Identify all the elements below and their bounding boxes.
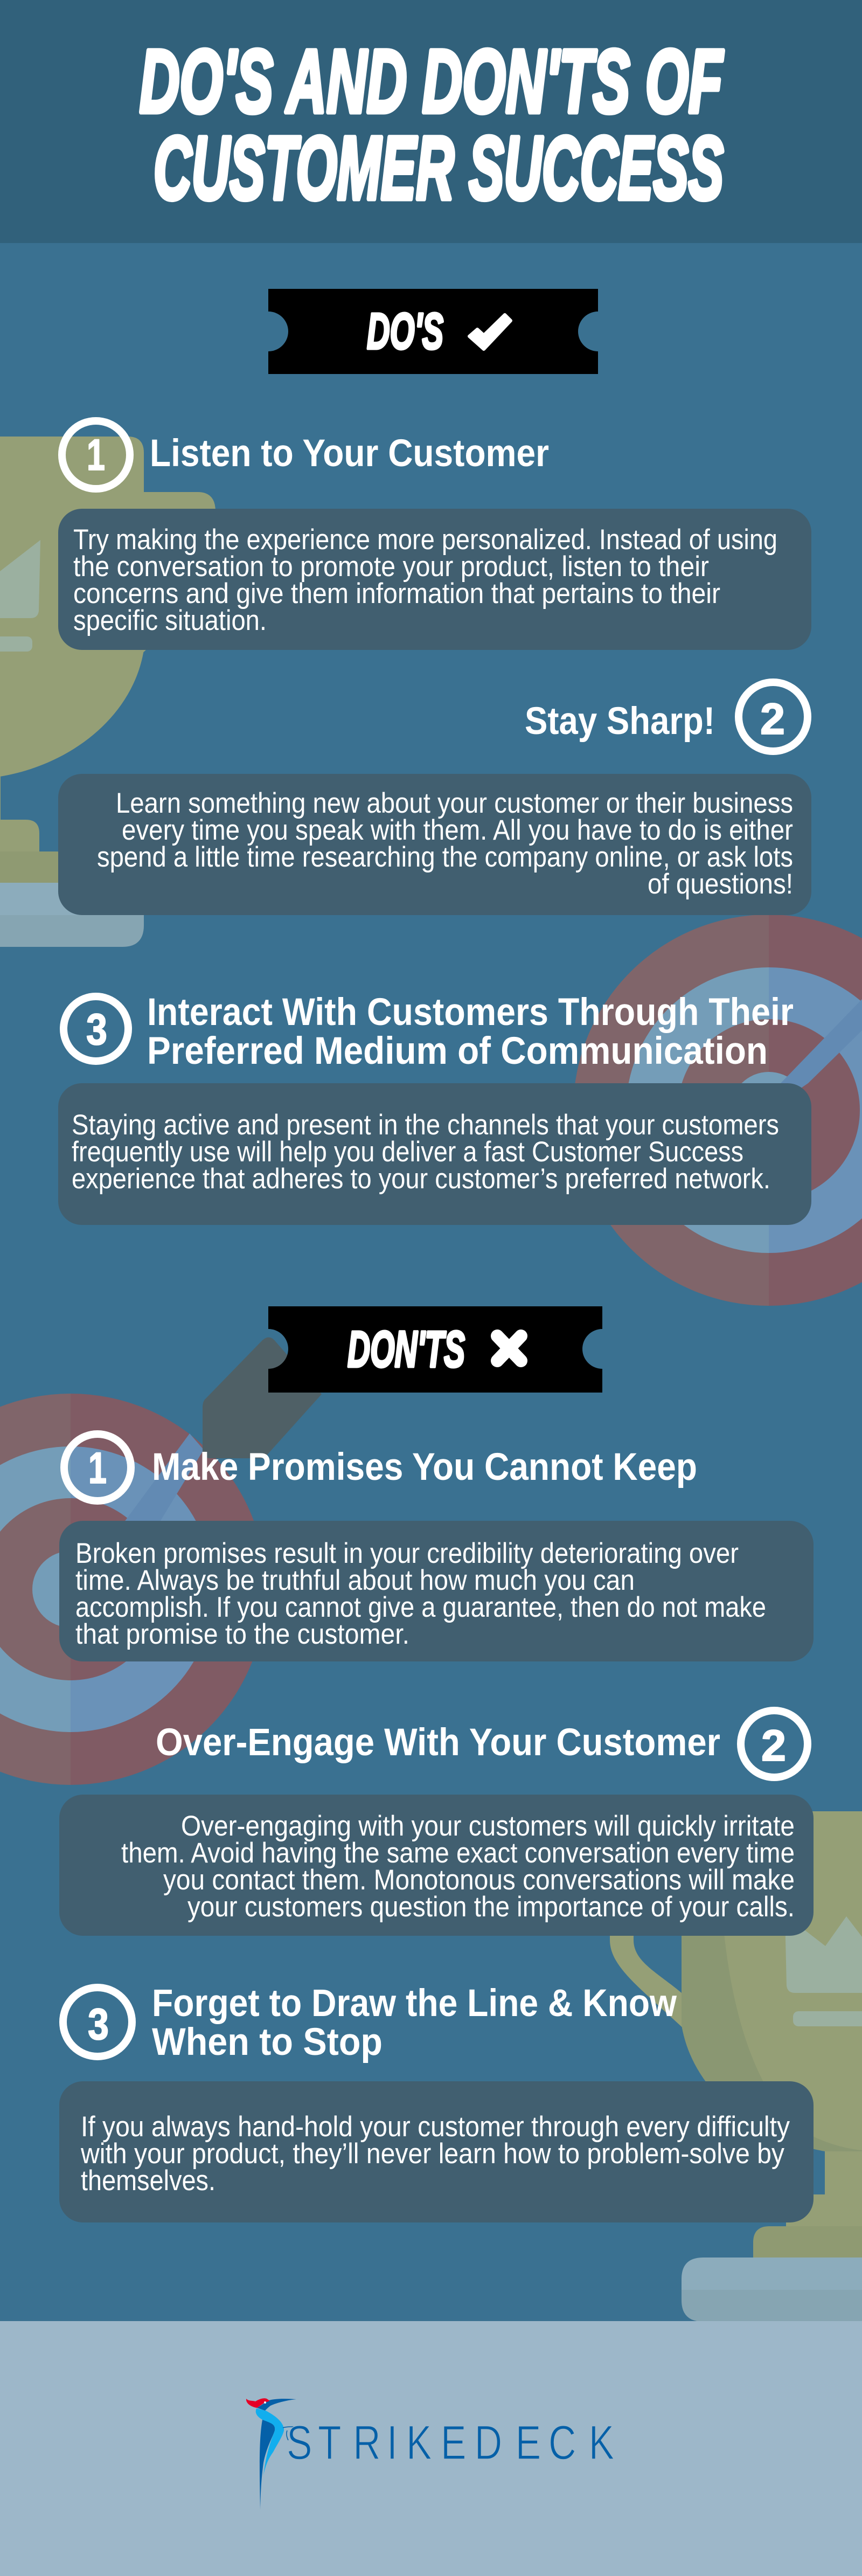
text panel: accomplish. If you cannot give a guarantee, then do not make [75, 1591, 766, 1623]
do 1: listen to your customer [58, 421, 811, 650]
heading: When to Stop [152, 2021, 383, 2063]
text panel: Staying active and present in the channels that your customers [72, 1109, 779, 1141]
don't 3: draw the line [59, 1982, 814, 2222]
icon: cross [497, 1336, 521, 1361]
heading: Forget to Draw the Line & Know [152, 1982, 677, 2025]
background illustration: left target and arrow [0, 1337, 322, 1785]
text panel: If you always hand-hold your customer through every difficulty [81, 2111, 790, 2143]
section banner: do's [268, 289, 598, 374]
text panel: concerns and give them information that pertains to their [73, 578, 720, 610]
text panel: every time you speak with them. All you have to do is either [122, 814, 793, 846]
do 3: preferred medium [58, 991, 811, 1225]
number badge 3: 3 [88, 2000, 109, 2049]
background illustration: left trophy [0, 437, 215, 947]
number badge 3 [64, 996, 128, 1061]
do 2: stay sharp [58, 682, 811, 915]
text panel: the conversation to promote your product, listen to their [73, 551, 709, 583]
background illustration: right trophy [610, 1811, 862, 2322]
text panel [59, 2081, 814, 2222]
logo: strikedeck [246, 2398, 614, 2510]
text panel: experience that adheres to your customer’s preferred network. [72, 1163, 770, 1195]
heading [147, 991, 794, 1072]
heading: Stay Sharp! [525, 700, 715, 743]
don't 2: over-engage [59, 1711, 814, 1936]
icon: woodpecker [246, 2398, 296, 2510]
text panel [59, 1521, 814, 1661]
number badge 2 [741, 1711, 808, 1777]
number badge 2: 2 [760, 695, 785, 744]
header band [0, 0, 862, 243]
text panel: spend a little time researching the company online, or ask lots [97, 841, 793, 873]
number badge 3: 3 [86, 1005, 107, 1054]
background illustration: right target [573, 915, 862, 1306]
heading: Make Promises You Cannot Keep [152, 1446, 697, 1488]
text panel: specific situation. [73, 605, 267, 636]
number badge 2: 2 [761, 1721, 786, 1770]
text panel: that promise to the customer. [75, 1618, 409, 1650]
text panel: with your product, they’ll never learn how to problem-solve by [80, 2138, 784, 2170]
section banner: don'ts [268, 1306, 602, 1393]
section banner: do's: DO'S [367, 303, 443, 360]
text panel: of questions! [648, 868, 793, 900]
text panel: time. Always be truthful about how much you can [75, 1564, 635, 1596]
text panel: your customers question the importance of your calls. [187, 1891, 795, 1923]
text panel: them. Avoid having the same exact conversation every time [121, 1837, 795, 1869]
heading: Listen to Your Customer [150, 432, 549, 475]
footer band [0, 2321, 862, 2576]
text panel [58, 509, 811, 650]
text panel: Over-engaging with your customers will quickly irritate [181, 1810, 795, 1842]
text panel: Broken promises result in your credibility deteriorating over [75, 1538, 739, 1569]
text panel: Try making the experience more personalized. Instead of using [73, 524, 777, 556]
text panel [59, 1795, 814, 1936]
text panel: Learn something new about your customer or their business [116, 787, 793, 819]
number badge 1: 1 [88, 1444, 107, 1493]
number badge 1 [64, 1434, 131, 1501]
wordmark: STRIKEDECK [287, 2416, 614, 2470]
text panel [58, 774, 811, 915]
text panel: themselves. [81, 2165, 215, 2197]
heading: Interact With Customers Through Their [147, 991, 794, 1034]
text panel: frequently use will help you deliver a fast Customer Success [72, 1136, 743, 1168]
number badge 1 [62, 421, 130, 489]
text panel: you contact them. Monotonous conversations will make [163, 1864, 795, 1896]
number badge 2 [739, 682, 808, 751]
number badge 1: 1 [87, 431, 105, 480]
heading [152, 1982, 677, 2063]
title [140, 32, 724, 218]
heading: Over-Engage With Your Customer [156, 1721, 720, 1764]
text panel [58, 1083, 811, 1225]
icon: check mark [469, 315, 511, 349]
heading: Preferred Medium of Communication [147, 1030, 768, 1072]
don't 1: make promises [59, 1434, 814, 1661]
number badge 3 [63, 1988, 132, 2056]
section banner: don'ts: DON'TS [347, 1321, 465, 1378]
